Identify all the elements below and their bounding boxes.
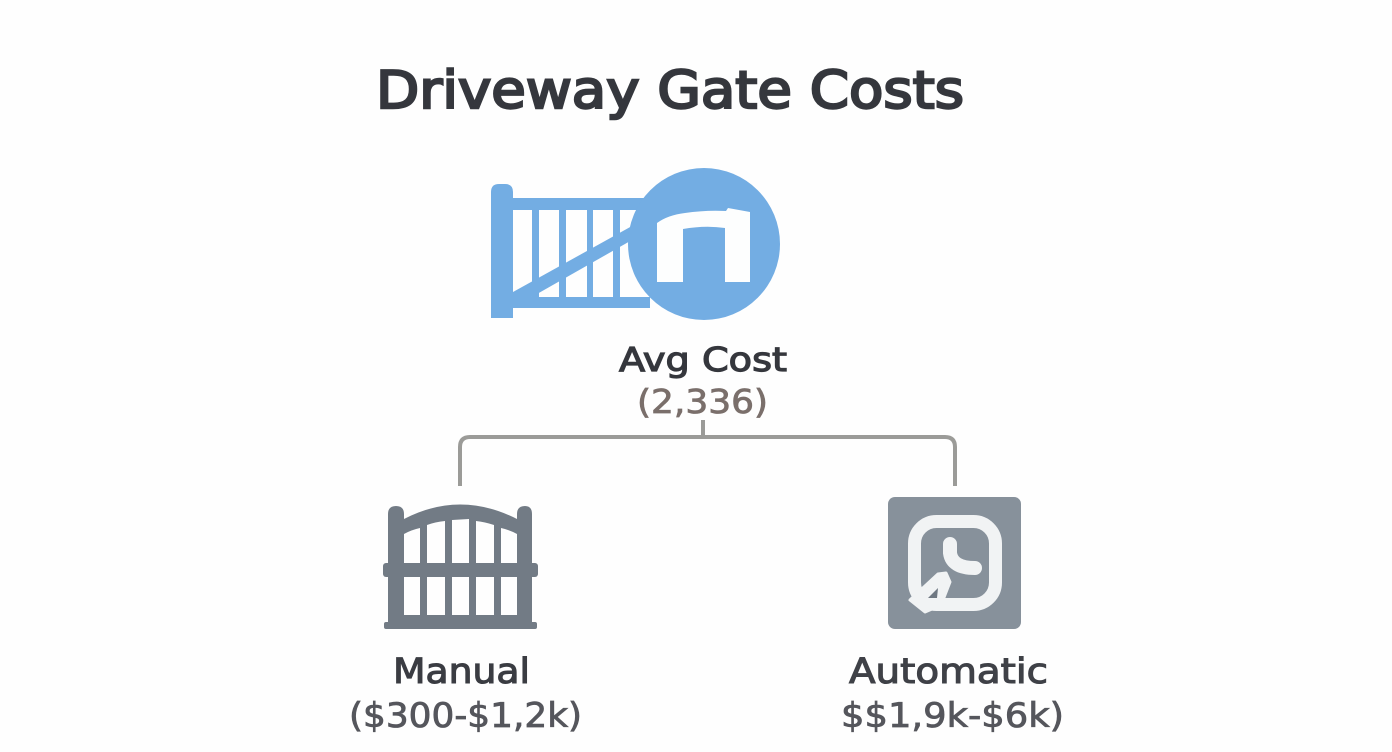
corner pointer — [910, 573, 950, 612]
icon: manual gate — [383, 504, 538, 629]
circle — [628, 168, 780, 320]
connector: tree branches — [460, 420, 955, 486]
square background — [888, 497, 1021, 629]
price range: ($300-$1,2k) — [349, 696, 582, 736]
label: average cost — [619, 340, 787, 421]
posts — [388, 506, 532, 625]
title: Driveway Gate Costs — [376, 61, 964, 121]
heading: Automatic — [849, 652, 1048, 692]
white arch symbol — [657, 208, 750, 282]
middle rail — [383, 563, 538, 577]
value: (2,336) — [637, 382, 768, 421]
icon: automatic clock remote — [888, 497, 1021, 629]
heading: Avg Cost — [619, 340, 787, 379]
base — [384, 615, 537, 629]
heading: Manual — [393, 652, 530, 692]
icon: blue sliding gate with circle — [491, 168, 780, 320]
gate frame and bars — [513, 198, 650, 308]
label: manual — [349, 652, 582, 736]
gate post — [491, 184, 513, 318]
pointer inner gap — [928, 588, 938, 598]
arch and bars — [404, 504, 517, 625]
clock hand — [950, 544, 975, 568]
diagonal brace — [513, 226, 632, 298]
label: automatic — [841, 652, 1064, 736]
price range: $$1,9k-$6k) — [841, 696, 1064, 736]
rounded outline — [914, 522, 996, 604]
